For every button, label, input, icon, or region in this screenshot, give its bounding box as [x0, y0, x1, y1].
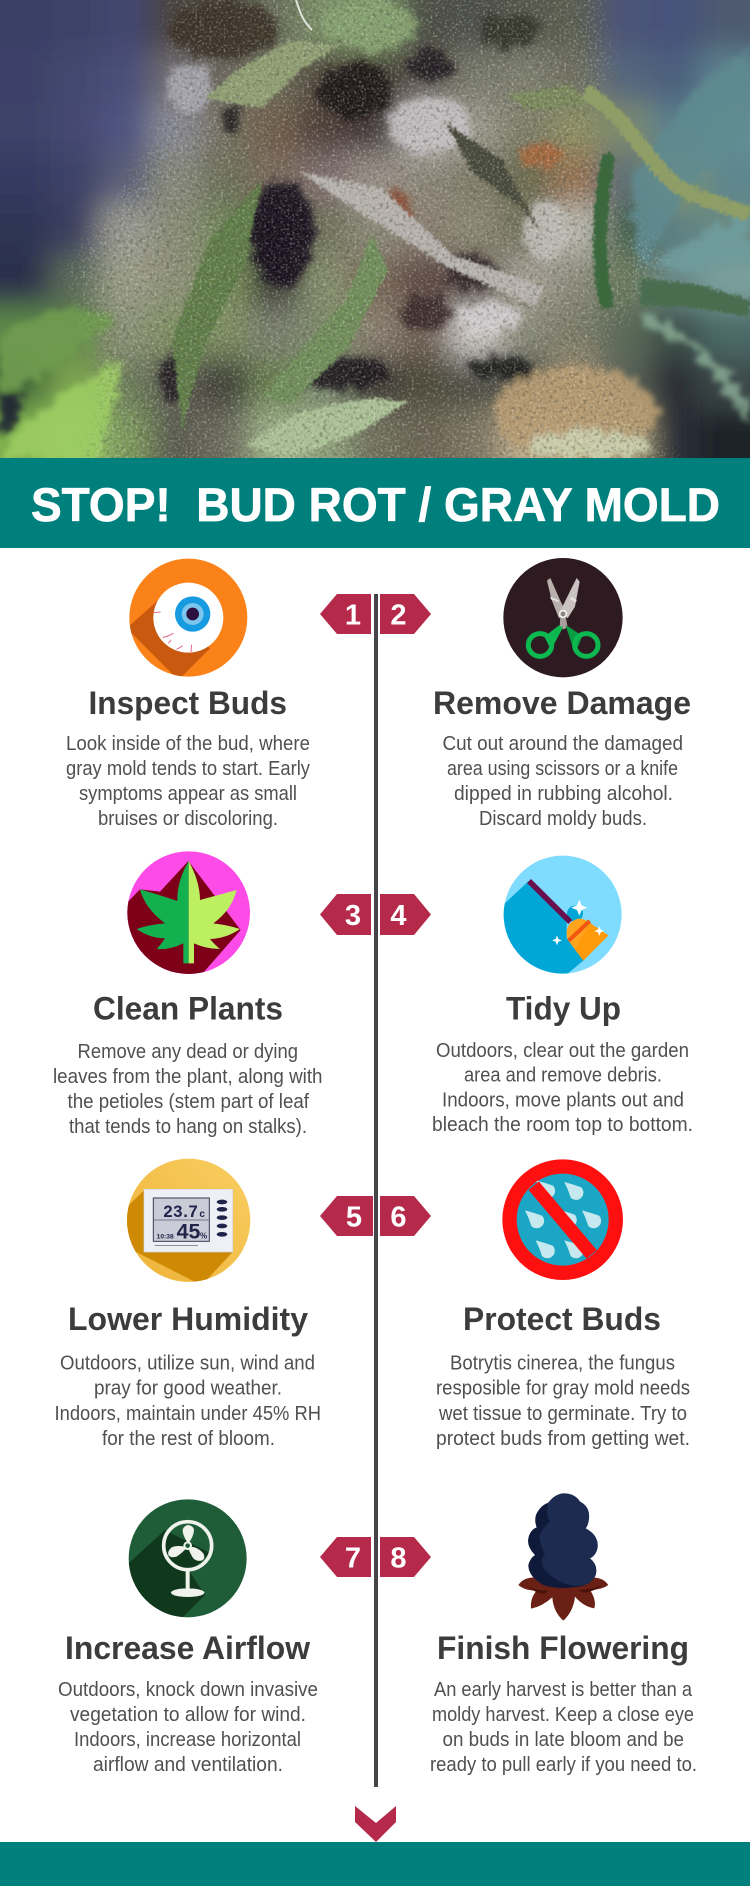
- body text: symptoms appear as small: [79, 783, 297, 805]
- icon: hygrometer: [123, 1159, 250, 1285]
- panel: step 1 inspect buds: [66, 559, 310, 830]
- step 4 number tag: 4: [390, 900, 407, 932]
- step 6 number tag: 6: [390, 1202, 407, 1234]
- icon: fan: [127, 1499, 247, 1622]
- body text: An early harvest is better than a: [434, 1679, 693, 1701]
- step 8 number tag: [380, 1537, 431, 1577]
- icon: broom: [502, 856, 622, 981]
- panel: step 5 lower humidity: [54, 1159, 321, 1450]
- body text: protect buds from getting wet.: [436, 1428, 690, 1450]
- step 8 number tag: 8: [390, 1542, 407, 1574]
- body text: [442, 733, 683, 830]
- body text: vegetation to allow for wind.: [70, 1704, 306, 1726]
- icon: scissors: [503, 558, 623, 677]
- step 4 number tag: [380, 894, 431, 935]
- body text: Outdoors, knock down invasive: [58, 1679, 318, 1701]
- icon: no water drops: [502, 1159, 623, 1280]
- title banner: [0, 458, 750, 548]
- body text: resposible for gray mold needs: [436, 1378, 690, 1400]
- icon: hygrometer: 45: [177, 1220, 201, 1244]
- body text: Discard moldy buds.: [479, 808, 647, 830]
- step 6 number tag: [380, 1196, 431, 1236]
- step 3 number tag: 3: [345, 900, 361, 932]
- icon: eyeball: [127, 559, 247, 680]
- body text: dipped in rubbing alcohol.: [454, 783, 673, 805]
- step 7 number tag: 7: [345, 1542, 361, 1574]
- step 1 number tag: 1: [345, 600, 361, 632]
- heading: Tidy Up: [506, 990, 621, 1026]
- icon: hygrometer: 23.7: [163, 1202, 198, 1221]
- body text: pray for good weather.: [94, 1378, 282, 1400]
- body text: for the rest of bloom.: [102, 1428, 275, 1450]
- body text: Indoors, maintain under 45% RH: [54, 1403, 321, 1425]
- body text: bleach the room top to bottom.: [432, 1114, 693, 1136]
- body text: [436, 1352, 690, 1450]
- icon: hygrometer: c: [199, 1209, 205, 1220]
- panel: step 3 clean plants: [53, 851, 322, 1138]
- heading: Inspect Buds: [88, 685, 287, 721]
- body text: [53, 1041, 322, 1138]
- center timeline line: [374, 594, 378, 1787]
- icon: hygrometer: 10:38: [157, 1234, 174, 1241]
- body text: ready to pull early if you need to.: [430, 1754, 697, 1776]
- body text: Indoors, move plants out and: [442, 1090, 684, 1112]
- icon: mature bud: [518, 1493, 608, 1621]
- heading: Remove Damage: [433, 685, 691, 721]
- heading: Clean Plants: [93, 990, 283, 1026]
- title text: STOP! BUD ROT / GRAY MOLD: [31, 478, 720, 531]
- body text: moldy harvest. Keep a close eye: [432, 1704, 694, 1726]
- body text: Look inside of the bud, where: [66, 733, 310, 755]
- icon: hygrometer: %: [200, 1232, 207, 1241]
- body text: airflow and ventilation.: [93, 1754, 283, 1776]
- panel: step 4 tidy up: [432, 856, 693, 1136]
- body text: gray mold tends to start. Early: [66, 758, 310, 780]
- step 3 number tag: [320, 894, 371, 935]
- step 1 number tag: [320, 594, 371, 634]
- icon: cannabis leaf: [127, 851, 250, 974]
- body text: [58, 1679, 318, 1776]
- heading: Lower Humidity: [68, 1301, 308, 1337]
- body text: Cut out around the damaged: [442, 733, 683, 755]
- body text: Botrytis cinerea, the fungus: [450, 1352, 675, 1374]
- step 2 number tag: 2: [390, 600, 407, 632]
- body text: [54, 1352, 321, 1450]
- step 5 number tag: [320, 1196, 373, 1236]
- body text: Indoors, increase horizontal: [74, 1729, 301, 1751]
- heading: Finish Flowering: [437, 1630, 689, 1666]
- panel: step 2 remove damage: [433, 558, 691, 830]
- body text: Outdoors, clear out the garden: [436, 1040, 689, 1062]
- step 7 number tag: [320, 1537, 371, 1577]
- body text: wet tissue to germinate. Try to: [438, 1403, 687, 1425]
- body text: bruises or discoloring.: [98, 808, 278, 830]
- panel: step 7 increase airflow: [58, 1499, 318, 1776]
- step 2 number tag: [380, 594, 431, 634]
- body text: the petioles (stem part of leaf: [68, 1091, 309, 1113]
- photo: bud rot on cannabis flower: [0, 0, 750, 458]
- body text: on buds in late bloom and be: [442, 1729, 684, 1751]
- panel: step 6 protect buds: [436, 1159, 690, 1450]
- heading: Protect Buds: [463, 1301, 661, 1337]
- body text: [432, 1040, 693, 1136]
- body text: area using scissors or a knife: [447, 758, 678, 780]
- body text: [66, 733, 310, 830]
- body text: Remove any dead or dying: [78, 1041, 298, 1063]
- panel: step 8 finish flowering: [430, 1493, 697, 1776]
- body text: that tends to hang on stalks).: [69, 1116, 307, 1138]
- footer bar: [0, 1842, 750, 1886]
- body text: [430, 1679, 697, 1776]
- heading: Increase Airflow: [65, 1630, 310, 1666]
- body text: leaves from the plant, along with: [53, 1066, 322, 1088]
- body text: Outdoors, utilize sun, wind and: [60, 1352, 315, 1374]
- step 5 number tag: 5: [346, 1202, 362, 1234]
- arrow: down chevron: [355, 1806, 396, 1842]
- body text: area and remove debris.: [464, 1064, 662, 1086]
